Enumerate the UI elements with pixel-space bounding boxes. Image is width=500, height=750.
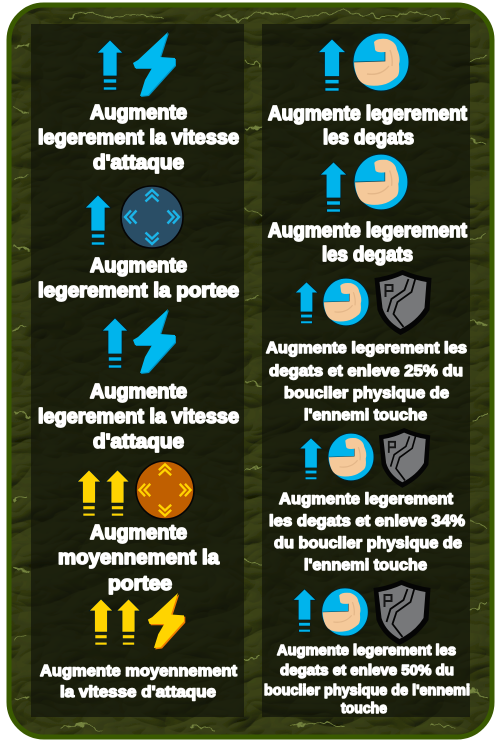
panel: left column xyxy=(31,24,244,717)
text: damage 1: Augmente legerement xyxy=(268,103,467,125)
text: shield 50: touche xyxy=(341,700,387,717)
text: attack speed 1 xyxy=(38,102,239,174)
text: range: legerement la portee xyxy=(38,280,239,302)
text: attack speed 1: legerement la vitesse xyxy=(38,127,239,149)
text: medium range xyxy=(58,522,220,595)
icon: muscle 2 xyxy=(354,154,408,210)
text: shield 34: les degats et enleve 34% xyxy=(269,513,465,530)
text: range: Augmente xyxy=(90,255,187,277)
text: shield 34: l'ennemi touche xyxy=(304,557,427,574)
text: damage 1: les degats xyxy=(323,127,414,149)
text: shield 25: Augmente legerement les xyxy=(266,340,467,357)
text: damage 2 xyxy=(268,220,467,266)
text: attack speed 2: d'attaque xyxy=(93,431,184,453)
text: damage 2: les degats xyxy=(322,244,413,266)
icon: blue arrow, attack speed 1 xyxy=(97,40,123,90)
icon: muscle 4 xyxy=(328,433,374,481)
text: shield 25: l'ennemi touche xyxy=(304,407,427,424)
text: medium attack speed: la vitesse d'attaque xyxy=(60,684,216,701)
panel: right column xyxy=(262,24,470,717)
text: shield 34 xyxy=(269,491,465,574)
text: medium attack speed xyxy=(40,663,238,701)
icon: shield 3 xyxy=(374,580,430,645)
text: damage 2: Augmente legerement xyxy=(268,220,467,242)
text: shield 34: Augmente legerement xyxy=(279,491,454,508)
icon: blue arrow, damage and shield 34 xyxy=(300,438,322,480)
text: attack speed 1: d'attaque xyxy=(93,152,184,174)
icon: blue arrow, attack speed 2 xyxy=(102,318,128,368)
icon: blue lightning 2 xyxy=(133,309,176,374)
text: attack speed 2: Augmente xyxy=(90,381,187,403)
text: attack speed 2: legerement la vitesse xyxy=(38,406,239,428)
icon: blue arrow, damage and shield 50 xyxy=(293,589,316,632)
icon: double yellow arrows, attack speed xyxy=(89,599,140,645)
text: medium range: Augmente xyxy=(90,522,187,544)
icon: blue arrow, damage 2 xyxy=(320,162,347,212)
text: shield 50: Augmente legerement les xyxy=(277,642,456,659)
text: medium attack speed: Augmente moyennement xyxy=(40,663,238,680)
icon: blue arrow, damage and shield 25 xyxy=(295,282,318,324)
text: shield 50: bouclier physique de l'ennemi xyxy=(264,682,470,699)
icon: shield 2 xyxy=(379,428,430,488)
text: shield 50 xyxy=(264,642,470,717)
text: attack speed 1: Augmente xyxy=(90,102,187,124)
icon: orange range circle xyxy=(136,461,194,519)
text: shield 34: du bouclier physique de xyxy=(274,535,462,552)
text: attack speed 2 xyxy=(38,381,239,453)
text: shield 25: bouclier physique de xyxy=(284,385,449,402)
text: medium range: portee xyxy=(108,573,172,595)
icon: shield 1 xyxy=(374,270,432,335)
icon: double yellow arrows, range xyxy=(77,470,129,516)
icon: muscle 3 xyxy=(323,278,369,326)
icon: blue range circle xyxy=(121,186,183,248)
icon: blue arrow, damage 1 xyxy=(318,39,346,91)
icon: blue arrow, range xyxy=(85,195,111,245)
text: shield 25 xyxy=(266,340,467,424)
icon: yellow lightning xyxy=(148,593,185,649)
text: shield 25: degats et enleve 25% du xyxy=(269,363,463,380)
icon: muscle 1 xyxy=(353,33,409,91)
text: shield 50: degats et enleve 50% du xyxy=(280,662,454,679)
text: range xyxy=(38,255,239,302)
icon: blue lightning 1 xyxy=(133,32,176,97)
text: damage 1 xyxy=(268,103,467,149)
text: medium range: moyennement la xyxy=(58,547,220,569)
icon: muscle 5 xyxy=(322,588,368,636)
